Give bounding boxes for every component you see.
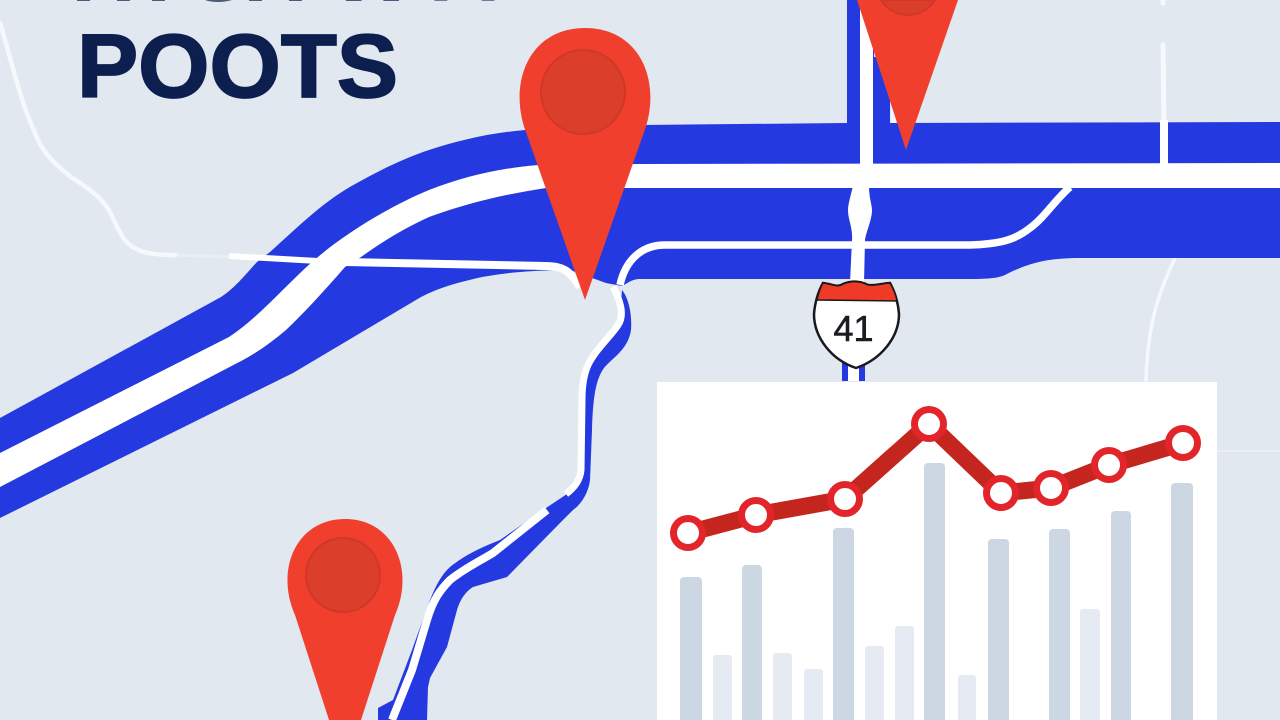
- chart panel: [657, 382, 1217, 720]
- highway: white centre road: [0, 0, 1280, 487]
- highway: main blue corridor: [0, 0, 1280, 518]
- trend line: [688, 424, 1183, 533]
- title: [71, 0, 580, 117]
- bars: background series: [713, 609, 1100, 720]
- pin: top: [857, 0, 958, 150]
- corridor notch: [891, 108, 896, 123]
- trend markers: [674, 410, 1198, 548]
- thin connector roads: [229, 187, 1070, 287]
- interstate 41 shield: [814, 282, 899, 368]
- interstate 41 shield: 41: [833, 308, 874, 349]
- title: POOTS: [77, 17, 398, 117]
- pin: left: [287, 519, 403, 720]
- road legs below shield: [842, 362, 865, 381]
- branch road south: [378, 287, 631, 720]
- minor roads: [0, 0, 1280, 451]
- bars: main series: [680, 463, 1193, 720]
- pin: centre: [520, 28, 650, 300]
